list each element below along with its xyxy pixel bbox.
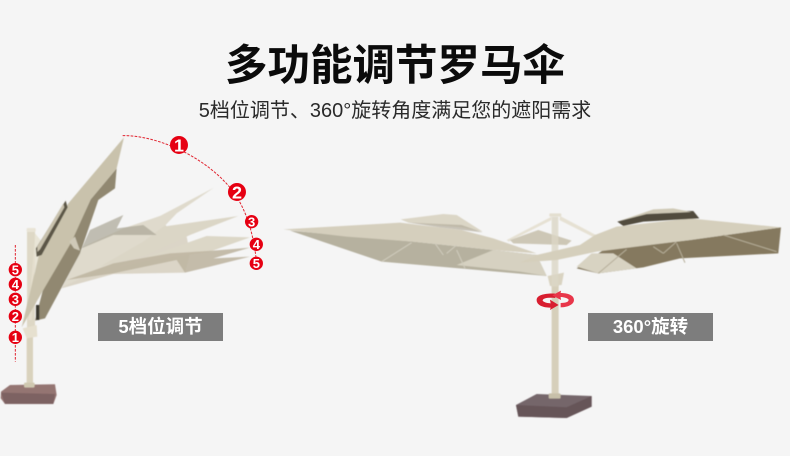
back small canopy [510, 230, 572, 245]
pole badge 4: 4 [12, 277, 20, 292]
label: 360 rotation [588, 313, 713, 341]
right canopy light panel [577, 253, 637, 273]
left canopy [283, 214, 547, 276]
right canopy top [520, 218, 781, 263]
main canopy [22, 137, 124, 327]
ghost canopy position 2 [63, 188, 214, 287]
subtitle: 5档位调节、360°旋转角度满足您的遮阳需求 [199, 100, 591, 122]
arc badge 5: 5 [253, 256, 260, 271]
base [1, 384, 57, 404]
arc badge 3: 3 [248, 214, 255, 229]
ghost canopies [62, 188, 250, 288]
arc badge 4: 4 [253, 237, 261, 252]
arc badge 2: 2 [232, 182, 242, 202]
left canopy ribs [382, 243, 465, 268]
ghost canopy position 5 [67, 248, 250, 280]
arc dashed path [123, 136, 257, 263]
left canopy top [283, 223, 537, 253]
vent top [36, 201, 68, 257]
pole badge 5: 5 [12, 262, 19, 277]
arc badge 1: 1 [174, 135, 184, 155]
left canopy lighter overlap [457, 250, 547, 276]
pole [507, 213, 596, 399]
arc badges [170, 135, 263, 271]
right canopy underside [577, 227, 781, 273]
ghost canopy position 3 [100, 216, 238, 267]
rotation arrow icon [537, 291, 574, 310]
left canopy underside [290, 231, 547, 276]
ghost upper vent [82, 215, 157, 248]
pole badge 3: 3 [12, 292, 19, 307]
label: 360 rotation: 360°旋转 [613, 316, 688, 337]
pole [23, 228, 43, 388]
left illustration: tilting umbrella [1, 135, 263, 404]
canopy top [22, 137, 124, 327]
pole badge 2: 2 [12, 309, 19, 324]
right canopy ribs [598, 235, 777, 273]
bracket [69, 237, 80, 251]
left vent [401, 214, 483, 232]
center pole section [552, 217, 558, 287]
ghost canopy position 4 [113, 236, 250, 268]
label: 5 positions [98, 313, 223, 341]
pole badges [9, 262, 22, 345]
title: 多功能调节罗马伞 [225, 43, 565, 90]
canopy underside [35, 168, 117, 321]
vertical dashed scale [14, 245, 17, 362]
right vent [617, 211, 699, 226]
pole badge 1: 1 [12, 330, 19, 345]
ghost canopy backing [62, 216, 190, 288]
label: 5 positions: 5档位调节 [118, 316, 203, 337]
right canopy [520, 208, 781, 273]
base [516, 394, 592, 418]
right illustration: rotating umbrella [283, 208, 781, 418]
